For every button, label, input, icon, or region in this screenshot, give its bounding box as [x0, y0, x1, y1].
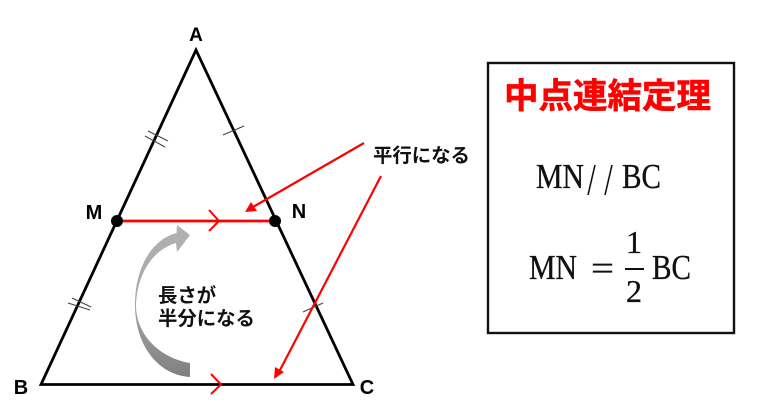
panel title: 中点連結定理 — [504, 78, 711, 116]
segment MN — [120, 210, 273, 231]
formula: parallel: BC — [622, 157, 661, 196]
label C: C — [360, 377, 374, 399]
formula: parallel: MN — [536, 157, 584, 196]
label A: A — [189, 25, 203, 46]
formula: half length: MN — [529, 248, 577, 287]
text: half the length — [158, 284, 255, 330]
formula: half length — [529, 224, 691, 309]
formula: half length: 2 — [626, 273, 642, 309]
red arrow to BC — [274, 176, 381, 379]
formula: parallel — [536, 157, 661, 196]
panel: theorem — [488, 63, 734, 333]
tick marks: equal segments — [68, 126, 323, 312]
red arrow to MN — [245, 143, 364, 212]
label B: B — [14, 377, 28, 399]
curved gray arrow — [135, 225, 190, 377]
label M: M — [86, 202, 102, 224]
text: half the length: 長さが — [158, 284, 216, 307]
formula: half length: 1 — [626, 224, 642, 260]
parallel mark on BC — [211, 374, 221, 394]
point M — [111, 215, 123, 227]
formula: half length: = — [591, 249, 614, 288]
label N: N — [292, 201, 306, 223]
formula: half length: BC — [652, 248, 691, 287]
triangle ABC — [41, 50, 353, 384]
callout: parallel: 平行になる — [373, 145, 470, 167]
point N — [269, 215, 281, 227]
text: half the length: 半分になる — [158, 308, 255, 330]
